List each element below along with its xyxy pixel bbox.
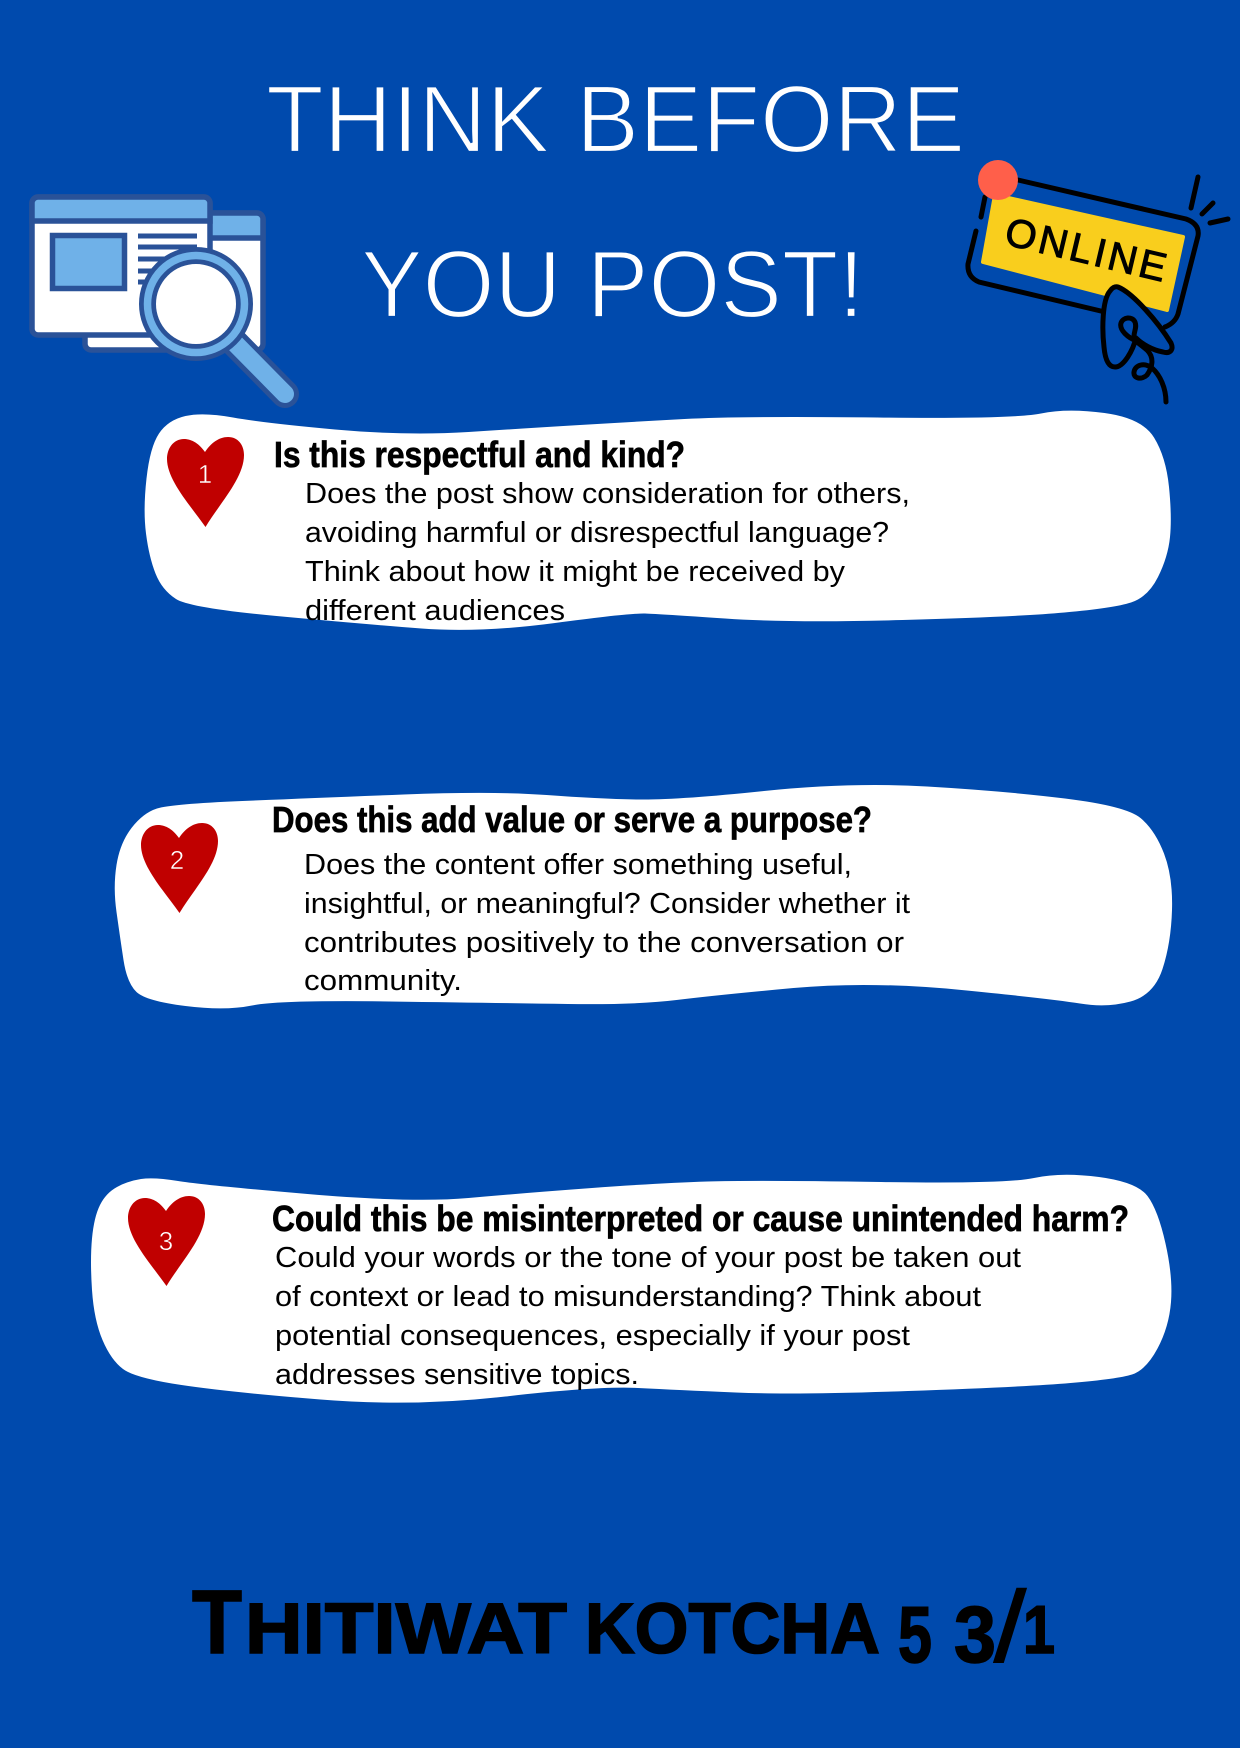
panel: misinterpreted or unintended harm xyxy=(91,1175,1171,1403)
heading 2: Does this add value or serve a purpose? xyxy=(272,799,872,840)
body text 3: potential consequences, especially if your post xyxy=(275,1320,910,1352)
body text 3: addresses sensitive topics. xyxy=(275,1359,639,1391)
body text 1: Does the post show consideration for others, xyxy=(305,478,910,510)
body text 1 xyxy=(305,478,910,627)
footer: author name and class xyxy=(192,1571,1055,1683)
heading 3: Could this be misinterpreted or cause unintended harm? xyxy=(272,1198,1129,1239)
body text 1: different audiences xyxy=(305,595,565,627)
footer: author name and class: 5 xyxy=(898,1590,932,1679)
sparks xyxy=(1191,177,1228,223)
body text 3: Could your words or the tone of your post be taken out xyxy=(275,1242,1021,1274)
footer: author name and class: 3 xyxy=(954,1590,996,1679)
body text 2 xyxy=(304,849,910,997)
body text 3 xyxy=(275,1242,1021,1391)
heart 3 xyxy=(128,1196,205,1286)
heart 1 xyxy=(167,437,244,527)
icon: online sign with cursor xyxy=(968,160,1228,402)
title: YOU POST! xyxy=(361,231,864,338)
footer: author name and class: HITIWAT xyxy=(245,1590,567,1669)
panel: respectful and kind xyxy=(145,411,1171,630)
cursor with curly tail xyxy=(1103,287,1172,402)
body text 1: Think about how it might be received by xyxy=(305,556,846,588)
panel 1 blob xyxy=(145,411,1171,630)
heart 1: 1 xyxy=(198,459,212,489)
panel: add value or serve a purpose xyxy=(115,785,1172,1008)
heart 3: 3 xyxy=(159,1226,173,1256)
footer: author name and class: 1 xyxy=(1023,1592,1055,1668)
body text 2: Does the content offer something useful, xyxy=(304,849,852,881)
panel 3 blob xyxy=(91,1175,1171,1403)
icon: browser windows with magnifying glass xyxy=(32,197,285,394)
title: THINK BEFORE xyxy=(266,66,965,173)
footer: author name and class: KOTCHA xyxy=(585,1590,880,1669)
body text 3: of context or lead to misunderstanding? Think about xyxy=(275,1281,981,1313)
panel 2 blob xyxy=(115,785,1172,1008)
online label: ONLINE xyxy=(1001,210,1171,290)
heading 1: Is this respectful and kind? xyxy=(274,434,685,475)
body text 2: contributes positively to the conversation or xyxy=(304,927,905,959)
title xyxy=(266,66,965,338)
heart 2: 2 xyxy=(170,845,184,875)
body text 1: avoiding harmful or disrespectful language? xyxy=(305,517,889,549)
body text 2: community. xyxy=(304,965,462,997)
heart 2 xyxy=(141,823,218,913)
footer: author name and class: / xyxy=(994,1571,1026,1683)
body text 2: insightful, or meaningful? Consider whether it xyxy=(304,888,910,920)
footer: author name and class: T xyxy=(192,1573,242,1673)
